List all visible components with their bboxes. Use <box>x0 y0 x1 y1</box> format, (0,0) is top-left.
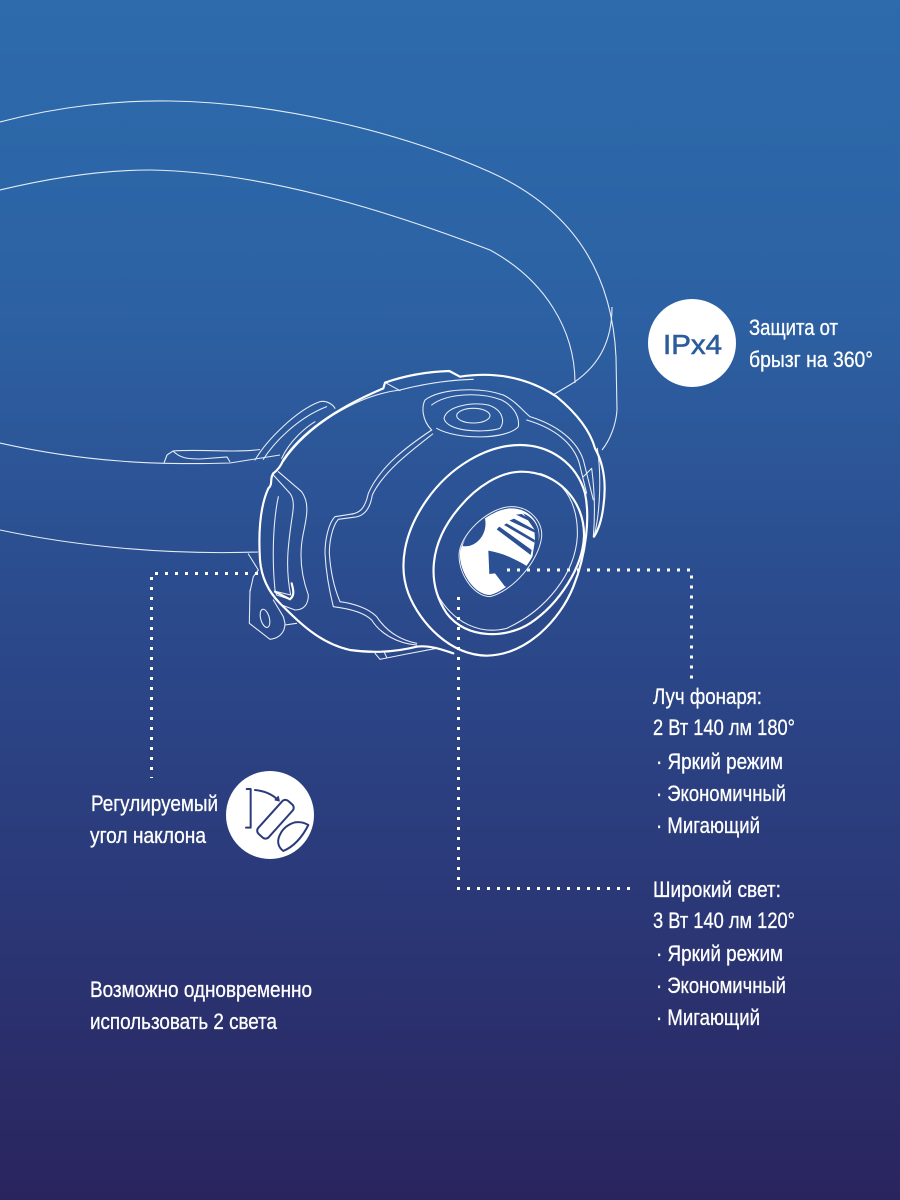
text: adjustable tilt: Регулируемый <box>91 791 218 816</box>
text: simultaneous use note: Возможно одновременно <box>90 977 312 1002</box>
dotted leader: adjustable tilt <box>152 574 258 778</box>
text: adjustable tilt: угол наклона <box>90 823 206 848</box>
icon: tilt angle <box>226 771 314 859</box>
headlamp body line drawing <box>248 371 605 659</box>
text: beam light specs: 2 Вт 140 лм 180° <box>653 715 795 740</box>
headband outline <box>0 101 617 553</box>
text: wide light specs: · Мигающий <box>656 1005 760 1030</box>
text: simultaneous use note: использовать 2 света <box>90 1009 277 1034</box>
text: wide light specs <box>653 877 795 1030</box>
thin detail lines <box>248 379 600 659</box>
text: beam light specs: Луч фонаря: <box>653 684 762 709</box>
reflector lens <box>459 507 542 597</box>
text: beam light specs: · Экономичный <box>656 781 786 806</box>
badge: IPx4: IPx4 <box>663 329 722 360</box>
text: adjustable tilt <box>90 791 218 848</box>
text: simultaneous use note <box>90 977 312 1034</box>
outer lens ring <box>403 445 587 656</box>
text: splash protection: брызг на 360° <box>749 347 873 372</box>
text: beam light specs: · Мигающий <box>656 813 760 838</box>
text: wide light specs: Широкий свет: <box>653 877 781 902</box>
text: wide light specs: · Яркий режим <box>656 941 783 966</box>
text: splash protection: Защита от <box>749 315 838 340</box>
text: beam light specs: · Яркий режим <box>656 749 783 774</box>
dotted leader: wide light <box>458 597 632 888</box>
text: wide light specs: 3 Вт 140 лм 120° <box>653 908 795 933</box>
dotted leader: beam light <box>507 570 692 682</box>
text: wide light specs: · Экономичный <box>656 973 786 998</box>
main body outline <box>259 371 605 653</box>
badge: IPx4 <box>648 299 736 387</box>
inner lens ring <box>434 472 584 634</box>
text: splash protection <box>749 315 873 372</box>
text: beam light specs <box>653 684 795 838</box>
